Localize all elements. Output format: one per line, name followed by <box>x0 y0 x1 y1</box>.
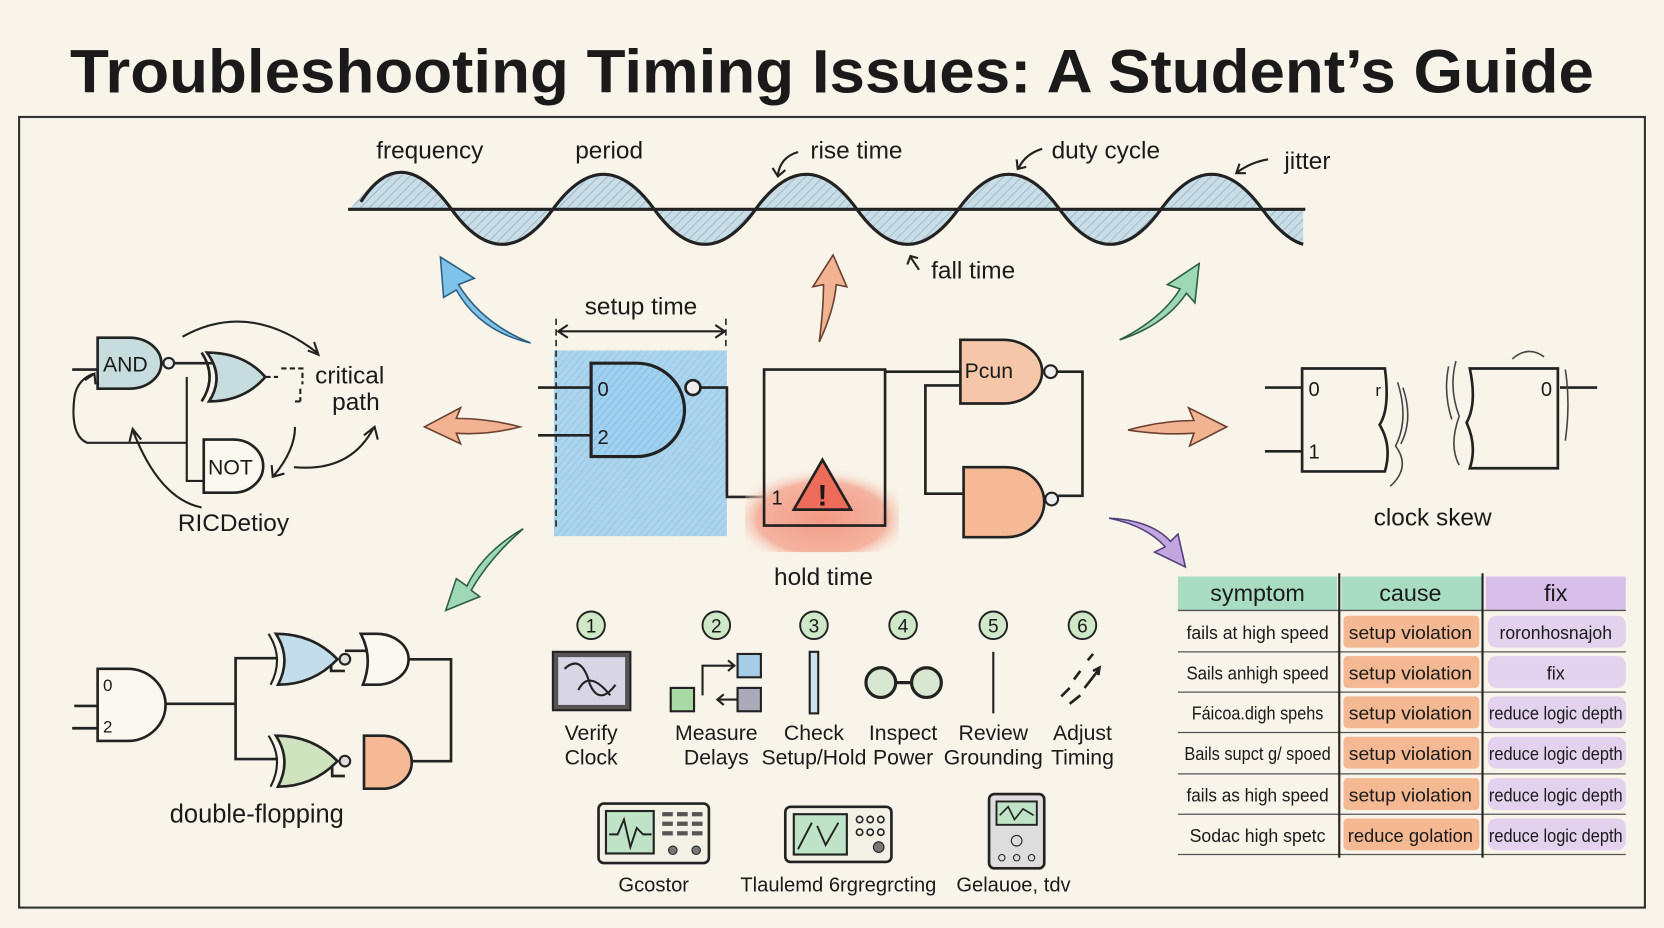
panel: critical path circuit: NOT <box>208 457 253 480</box>
panel: troubleshooting steps: Power <box>873 746 933 769</box>
panel: hold time box with warning: 1 <box>772 487 783 509</box>
table: symptom cause fix: Fáicoa.digh spehs <box>1192 704 1323 724</box>
panel: setup time gate: 2 <box>597 427 609 449</box>
icon: measure delays <box>671 654 761 711</box>
icon: check setup/hold bar <box>810 652 818 713</box>
icon: oscilloscope 2 <box>785 807 891 862</box>
waveform labels: fall time <box>931 257 1015 284</box>
panel: setup time gate: setup time <box>585 293 697 320</box>
waveform labels: duty cycle <box>1052 137 1160 164</box>
icon: warning triangle: ! <box>817 479 827 512</box>
table: symptom cause fix: setup violation <box>1349 744 1472 764</box>
panel: troubleshooting steps: Clock <box>565 746 618 769</box>
panel: troubleshooting steps: 3 <box>809 617 819 638</box>
panel: critical path circuit: critical <box>315 362 384 389</box>
panel: double-flopping <box>72 634 451 829</box>
table: symptom cause fix: setup violation <box>1349 663 1472 683</box>
table: symptom cause fix: reduce golation <box>1348 826 1473 846</box>
panel: NAND gates orange: Pcun <box>965 360 1013 383</box>
panel: clock skew flip-flops: clock skew <box>1374 505 1492 532</box>
panel: critical path circuit: AND <box>103 354 148 377</box>
table: symptom cause fix: Sodac high spetc <box>1190 826 1325 846</box>
panel: setup time gate: 0 <box>597 379 609 401</box>
panel: troubleshooting steps: 5 <box>988 617 999 638</box>
table: symptom cause fix: reduce logic depth <box>1489 744 1623 764</box>
panel: troubleshooting steps: Verify <box>565 722 618 745</box>
panel: clock skew flip-flops <box>1265 351 1597 532</box>
panel: troubleshooting steps: Delays <box>684 746 749 769</box>
waveform <box>348 172 1305 244</box>
table: symptom cause fix: Bails supct g/ spoed <box>1184 744 1331 764</box>
panel: critical path circuit: path <box>332 389 380 416</box>
icon: verify clock screen <box>553 652 630 710</box>
icon: inspect power <box>866 668 941 697</box>
panel: troubleshooting steps: Inspect <box>869 722 937 745</box>
table: symptom cause fix: fails at high speed <box>1186 623 1329 643</box>
panel: double-flopping: 2 <box>103 717 112 736</box>
table: symptom cause fix: reduce logic depth <box>1489 826 1623 846</box>
waveform labels: jitter <box>1283 148 1330 175</box>
panel: instruments: Tlaulemd 6rgregrcting <box>740 875 936 897</box>
panel: double-flopping: 0 <box>103 676 112 695</box>
panel: instruments: Gelauoe, tdv <box>956 875 1072 897</box>
icon: warning triangle <box>794 460 851 512</box>
waveform labels: period <box>575 137 643 164</box>
table: symptom cause fix: roronhosnajoh <box>1500 623 1612 643</box>
panel: troubleshooting steps: Timing <box>1051 746 1114 769</box>
table: symptom cause fix: symptom <box>1210 580 1305 606</box>
panel: clock skew flip-flops: 0 <box>1308 379 1320 401</box>
panel: troubleshooting steps: 4 <box>898 617 909 638</box>
panel: critical path circuit <box>72 322 384 508</box>
waveform labels <box>376 137 1330 284</box>
arrow: orange left <box>424 408 520 444</box>
arrow: green down-left <box>446 529 523 610</box>
panel: troubleshooting steps: Check <box>784 722 844 745</box>
panel: double-flopping: double-flopping <box>170 801 344 829</box>
table: symptom cause fix: cause <box>1379 580 1442 606</box>
arrow: orange right <box>1128 408 1227 446</box>
waveform labels: frequency <box>376 137 484 164</box>
arrow: green up-right <box>1120 263 1199 340</box>
icon: oscilloscope 1 <box>599 804 709 863</box>
panel: troubleshooting steps: 6 <box>1077 617 1088 638</box>
table: symptom cause fix: setup violation <box>1349 785 1472 805</box>
icon: adjust timing <box>1061 654 1099 704</box>
arrow: orange up <box>813 255 847 342</box>
panel: clock skew flip-flops: r <box>1375 381 1381 400</box>
table: symptom cause fix <box>1178 573 1626 858</box>
table: symptom cause fix: Sails anhigh speed <box>1186 663 1329 683</box>
panel: troubleshooting steps: Measure <box>675 722 758 745</box>
table: symptom cause fix: fix <box>1547 663 1565 683</box>
panel: setup time gate <box>538 293 764 536</box>
panel: instruments: Gcostor <box>618 875 689 897</box>
panel: hold time box with warning: hold time <box>774 564 873 591</box>
arrow: blue up-left <box>440 257 531 343</box>
panel: troubleshooting steps: Review <box>959 722 1029 745</box>
panel: troubleshooting steps <box>553 612 1114 769</box>
waveform labels: rise time <box>810 137 902 164</box>
panel: troubleshooting steps: Setup/Hold <box>761 746 866 769</box>
arrow: purple down-right <box>1109 518 1185 567</box>
table: symptom cause fix: fails as high speed <box>1186 785 1329 805</box>
title: Troubleshooting Timing Issues: A Student’s Guide <box>70 38 1594 107</box>
panel: troubleshooting steps: 2 <box>711 617 722 638</box>
panel: troubleshooting steps: Adjust <box>1053 722 1112 745</box>
panel: NAND gates orange <box>885 340 1082 537</box>
icon: review grounding <box>992 652 994 713</box>
panel: instruments <box>599 794 1072 897</box>
panel: clock skew flip-flops: 0 <box>1541 379 1552 401</box>
table: symptom cause fix: fix <box>1544 580 1568 606</box>
icon: handheld meter <box>989 794 1044 868</box>
panel: troubleshooting steps: Grounding <box>944 746 1043 769</box>
panel: clock skew flip-flops: 1 <box>1308 442 1320 464</box>
panel: hold time box with warning <box>745 370 899 591</box>
label: RICDetioy: RICDetioy <box>178 510 290 537</box>
table: symptom cause fix: reduce logic depth <box>1489 704 1623 724</box>
table: symptom cause fix: setup violation <box>1349 704 1472 724</box>
table: symptom cause fix: setup violation <box>1349 623 1472 643</box>
panel: troubleshooting steps: 1 <box>586 617 596 638</box>
table: symptom cause fix: reduce logic depth <box>1489 785 1623 805</box>
